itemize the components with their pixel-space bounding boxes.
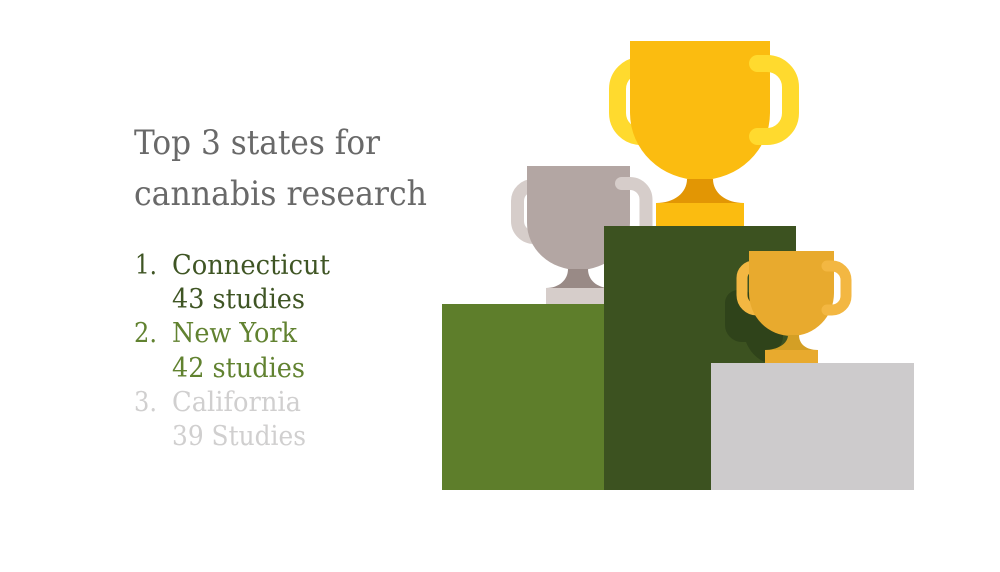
rank 3: California: 3. [134,387,157,418]
rank 2: New York: 42 studies [172,353,305,384]
rank 3: California: 39 Studies [172,421,306,452]
rank 1: Connecticut: 43 studies [172,284,305,315]
podium: second place [442,304,605,490]
title: Top 3 states for [134,123,381,163]
rank 3: California: California [172,387,301,418]
podium: third place [711,363,914,490]
rank 2: New York: New York [172,318,298,349]
silver trophy [518,166,646,305]
title [134,123,427,214]
rank 1: Connecticut: 1. [135,250,157,281]
rank 1: Connecticut: Connecticut [172,250,330,281]
rank 2: New York: 2. [134,318,157,349]
title: cannabis research [134,174,427,214]
rank 2: New York [134,318,305,384]
podium: first place [604,226,796,490]
rank 3: California [134,387,306,452]
rank 1: Connecticut [135,250,330,315]
ranking list [134,250,330,452]
trophy shadow [725,290,783,362]
bronze trophy [742,251,846,363]
gold trophy [618,41,790,227]
